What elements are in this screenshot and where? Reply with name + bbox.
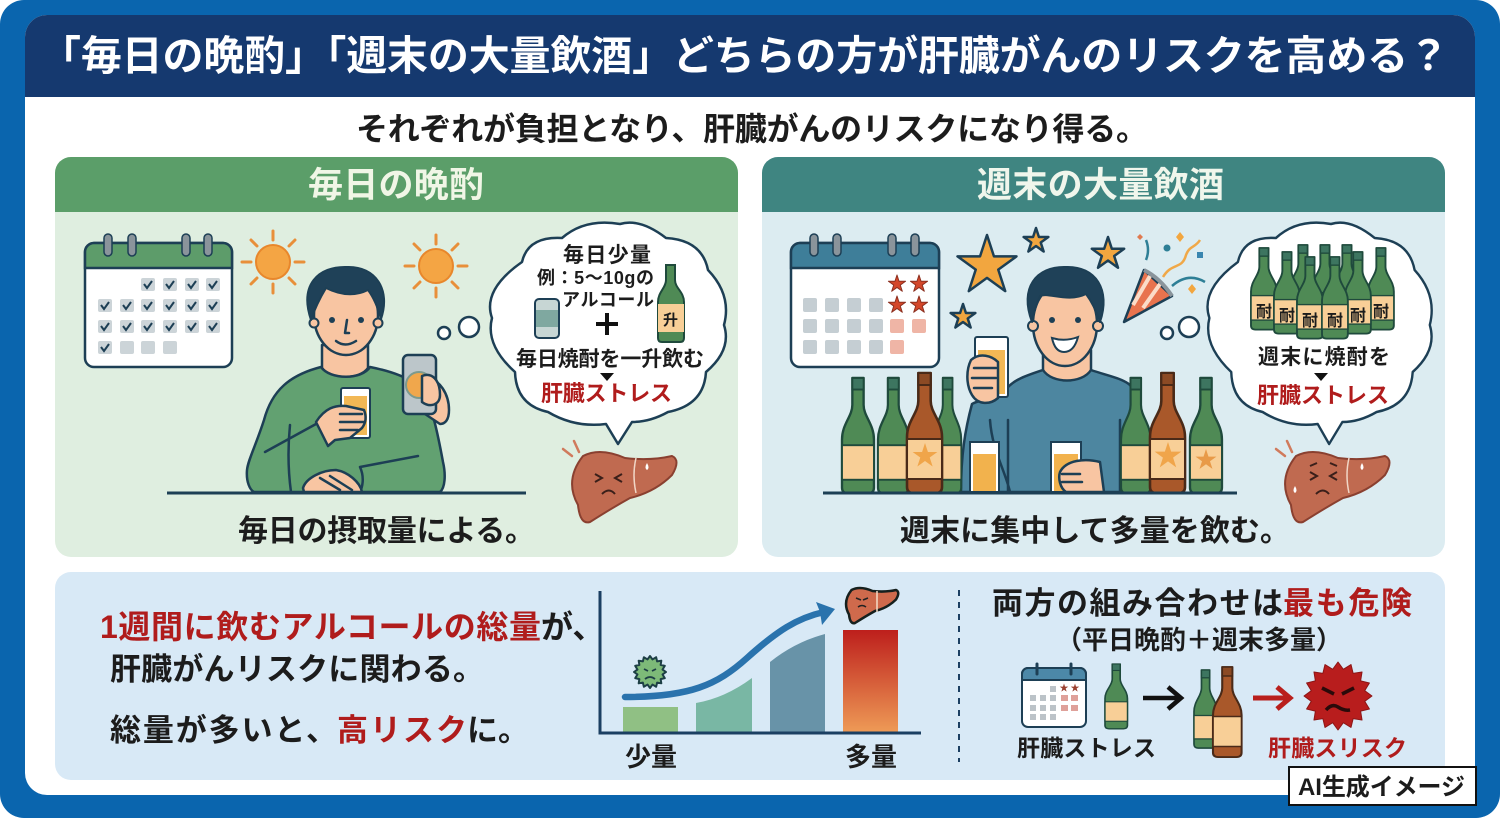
icon: bottles: 耐: [1302, 312, 1318, 330]
subtitle: それぞれが負担となり、肝臓がんのリスクになり得る。: [356, 111, 1148, 147]
beer glass with hand: [1051, 442, 1104, 492]
panel heading: 毎日の晩酌: [308, 166, 484, 205]
icon: liver sweating: [1276, 441, 1390, 522]
title banner: [25, 15, 1475, 97]
arrow: black: [1143, 687, 1181, 709]
thought bubble: [490, 223, 726, 444]
arrow: rising risk: [625, 602, 835, 697]
icon: small can: [535, 299, 559, 338]
text: high risk: に。: [467, 713, 529, 748]
bottles right group: [1121, 373, 1222, 493]
panel caption: 週末に集中して多量を飲む。: [900, 515, 1290, 548]
heading: combination: 両方の組み合わせは: [992, 586, 1283, 621]
flow: combined risk: [1017, 662, 1407, 761]
heading: combination: 最も危険: [1283, 586, 1412, 621]
thought bubble: 毎日少量: [563, 244, 651, 267]
panel background: [762, 157, 1445, 557]
divider: [958, 590, 960, 762]
icon: sun right: [405, 235, 467, 297]
icon: small calendar: [1022, 664, 1086, 727]
man drinking: [247, 267, 449, 492]
panel heading: [762, 157, 1445, 212]
label risk: 肝臓スリスク: [1268, 735, 1407, 761]
thought dots: [1161, 317, 1199, 339]
text: weekly total: 1週間に飲むアルコールの総量: [100, 609, 541, 645]
panel heading: 週末の大量飲酒: [977, 166, 1224, 205]
thought bubble: 毎日焼酎を一升飲む: [516, 348, 704, 371]
icon: shochu bottle: 升: [663, 312, 678, 329]
bar chart: [600, 588, 921, 772]
icon: bottles: 耐: [1350, 307, 1366, 325]
thought bubble: 例：5〜10gの: [537, 268, 654, 288]
text: high risk: 総量が多いと、: [110, 713, 337, 748]
plus sign: [596, 313, 618, 335]
icon: red germ: [1304, 662, 1372, 730]
subheading: （平日晩酌＋週末多量）: [1056, 625, 1342, 655]
icon: bottle: [1105, 664, 1127, 729]
thought bubble: 肝臓ストレス: [1257, 383, 1389, 408]
panel: daily drinking: [55, 157, 738, 557]
icon: party popper: [1124, 232, 1205, 322]
icon: angry liver: [846, 588, 898, 623]
panel background: [55, 572, 1445, 780]
icon: liver stressed: [563, 441, 676, 522]
text: weekly total: が、: [541, 609, 604, 645]
man celebrating: [961, 267, 1150, 492]
panel: summary: [55, 572, 1445, 780]
table line: [167, 492, 526, 494]
text: high risk: 高リスク: [337, 713, 467, 748]
axis label low: 少量: [625, 742, 677, 772]
bottles left group: [842, 373, 961, 493]
beer glass on table: [970, 442, 999, 492]
icon: calendar with stars: [791, 234, 939, 367]
icon: calendar with checks: [85, 234, 232, 367]
panel background: [55, 157, 738, 557]
icon: green germ: [634, 656, 666, 688]
icon: bottles: 耐: [1256, 303, 1272, 321]
thought bubble: アルコール: [562, 290, 654, 310]
text: high risk: [110, 713, 529, 748]
panel heading: [55, 157, 738, 212]
axis label high: 多量: [845, 742, 897, 772]
icon: stars: [951, 228, 1124, 328]
label stress: 肝臓ストレス: [1017, 735, 1156, 761]
text: weekly total: [100, 609, 604, 687]
panel: weekend binge drinking: [762, 157, 1445, 557]
title banner: 「毎日の晩酌」「週末の大量飲酒」どちらの方が肝臓がんのリスクを高める？: [40, 33, 1449, 79]
icon: shochu bottle: [658, 265, 684, 342]
heading: combination: [992, 586, 1412, 621]
thought bubble: 肝臓ストレス: [541, 381, 672, 406]
icon: bottles: 耐: [1373, 303, 1389, 321]
icon: sun left: [242, 231, 304, 293]
arrow: red: [1253, 687, 1290, 709]
badge: AI generated: AI生成イメージ: [1298, 774, 1465, 801]
icon: bottles: 耐: [1279, 307, 1295, 325]
panel caption: 毎日の摂取量による。: [238, 515, 535, 548]
icon: bottles: [1251, 245, 1394, 339]
table line: [823, 492, 1237, 494]
badge: AI generated: [1289, 767, 1476, 805]
text: weekly total: 肝臓がんリスクに関わる。: [110, 652, 484, 687]
thought bubble: [1208, 223, 1432, 444]
thought dots: [438, 317, 479, 339]
icon: bottles: 耐: [1327, 312, 1343, 330]
thought bubble: 週末に焼酎を: [1258, 346, 1390, 369]
icon: two bottles: [1194, 667, 1242, 757]
